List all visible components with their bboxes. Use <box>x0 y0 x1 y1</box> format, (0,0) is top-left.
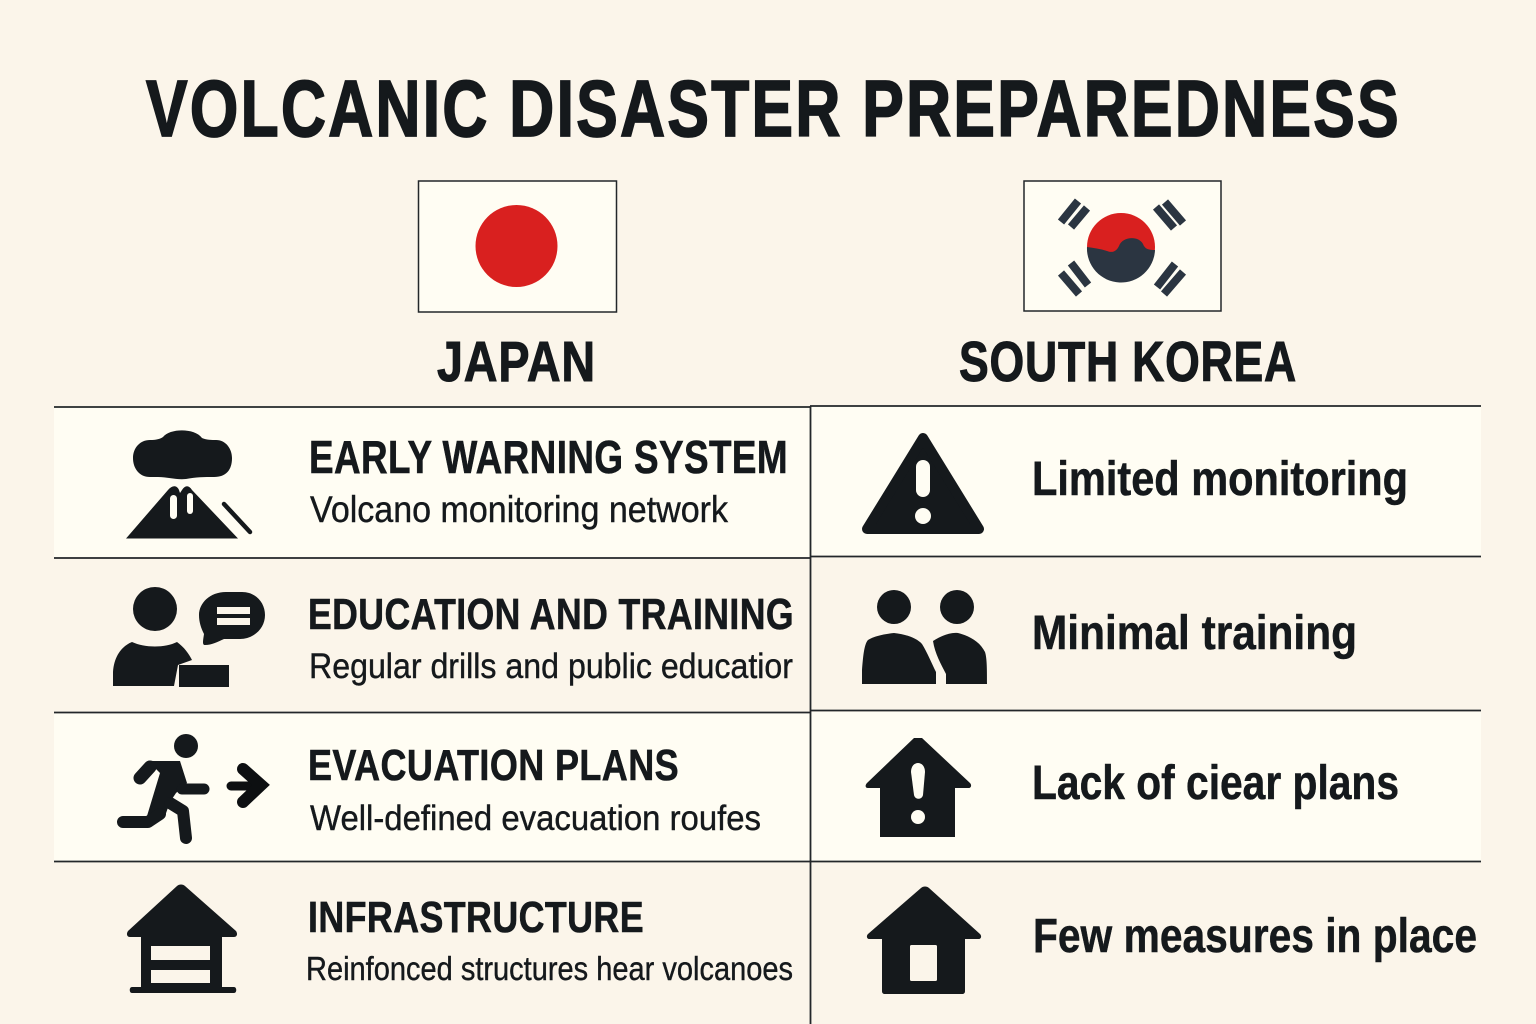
row 2 Japan: education and training <box>113 587 794 687</box>
description: routes: Well-defined evacuation roufes <box>310 799 761 838</box>
icon: volcano with ash cloud <box>126 430 250 538</box>
flag: Japan <box>418 181 616 312</box>
icon: warning triangle <box>867 438 979 529</box>
icon: reinforced building <box>127 884 237 993</box>
icon: running person with arrow <box>123 734 261 838</box>
row 3 South Korea: lack of clear plans <box>866 738 1399 837</box>
icon: house with window <box>867 886 981 994</box>
icon: house with exclamation mark <box>866 738 971 837</box>
description: monitoring network: Volcano monitoring network <box>310 489 728 530</box>
row 2 South Korea: minimal training <box>862 590 1357 684</box>
description: reinforced structures: Reinfonced structures hear volcanoes <box>306 950 793 987</box>
description: drills: Regular drills and public educatior <box>309 647 793 686</box>
row 1 Japan: early warning system <box>126 430 788 538</box>
row 4 South Korea: few measures in place <box>867 886 1477 994</box>
column heading: Japan: JAPAN <box>437 330 596 394</box>
row 1 South Korea: limited monitoring <box>867 438 1408 529</box>
heading: infrastructure: INFRASTRUCTURE <box>308 893 644 942</box>
text: limited monitoring: Limited monitoring <box>1032 453 1408 506</box>
text: lack of clear plans: Lack of ciear plans <box>1032 757 1399 810</box>
text: minimal training: Minimal training <box>1032 607 1357 660</box>
heading: early warning system: EARLY WARNING SYSTEM <box>309 431 788 483</box>
row 3 Japan: evacuation plans <box>123 734 761 838</box>
heading: evacuation plans: EVACUATION PLANS <box>308 741 679 790</box>
flag: South Korea <box>1024 181 1221 311</box>
icon: two people <box>862 590 987 684</box>
row 4 Japan: infrastructure <box>127 884 793 993</box>
icon: person with speech bubble <box>113 587 265 687</box>
column heading: South Korea: SOUTH KOREA <box>959 330 1297 394</box>
heading: education and training: EDUCATION AND TRAINING <box>308 590 794 639</box>
